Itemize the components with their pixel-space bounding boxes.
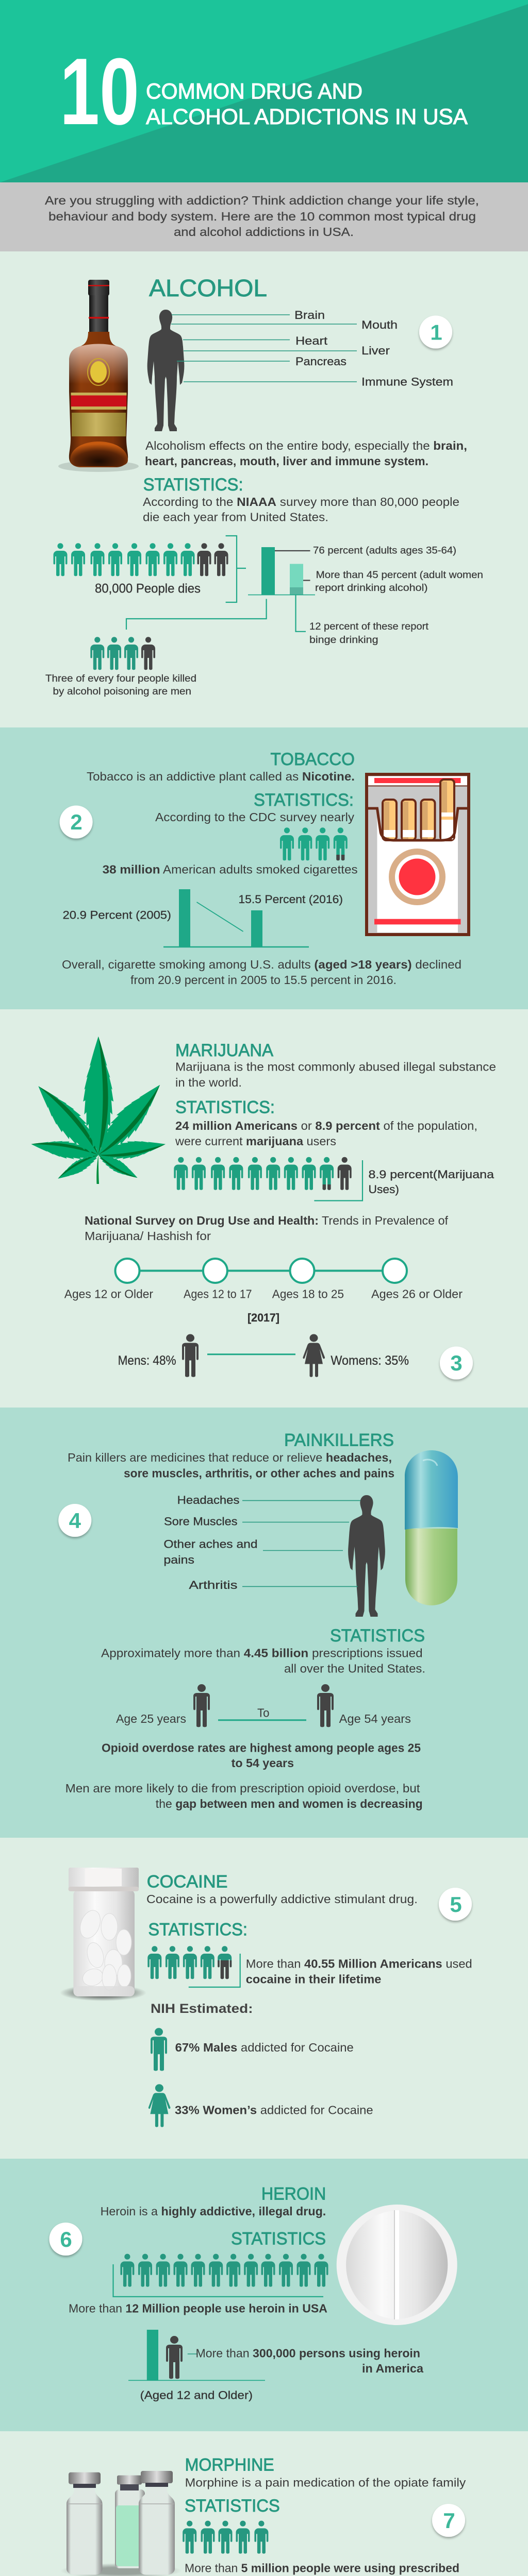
- men vs women: Mens: 48%: [118, 1353, 176, 1368]
- badge: number 6: 6: [60, 2227, 72, 2251]
- bracket: [226, 536, 246, 602]
- organ labels: [171, 309, 453, 388]
- overall text: from 20.9 percent in 2005 to 15.5 percent in 2016.: [130, 973, 397, 987]
- marijuana description: Marijuana is the most commonly abused illegal substance: [175, 1060, 496, 1074]
- statistics text: were current marijuana users: [175, 1134, 336, 1148]
- heading: tobacco: TOBACCO: [270, 750, 355, 769]
- icon: human body: [348, 1495, 385, 1617]
- panel: introduction: [0, 182, 528, 251]
- alcohol description: [145, 439, 467, 468]
- organ labels: Pancreas: [295, 355, 346, 368]
- caption: 40.55 million: cocaine in their lifetime: [246, 1973, 381, 1986]
- bar chart: percentages: binge drinking: [309, 635, 378, 646]
- statistics text: 24 million Americans or 8.9 percent of the population,: [175, 1119, 477, 1132]
- pictogram: 5 people: [183, 2521, 268, 2554]
- painkillers description: sore muscles, arthritis, or other aches and pains: [124, 1466, 394, 1480]
- title: COMMON DRUG AND: [146, 79, 362, 104]
- bar chart: 300,000 persons: More than 300,000 persons using heroin: [196, 2346, 420, 2360]
- icon: cannabis leaf: [29, 1037, 170, 1184]
- male stat: [151, 2028, 354, 2071]
- panel: morphine: [0, 2431, 528, 2576]
- age range graphic: Age 25 years: [116, 1712, 186, 1725]
- heading: heroin: HEROIN: [261, 2184, 326, 2204]
- badge: number 5: 5: [450, 1892, 462, 1917]
- badge: number 7: [432, 2504, 465, 2537]
- heading: statistics: STATISTICS:: [143, 475, 243, 495]
- caption: 40.55 million: [246, 1957, 472, 1986]
- pictogram: 12 people: [120, 2254, 328, 2287]
- timeline: age groups: Ages 26 or Older: [371, 1287, 463, 1300]
- opioid overdose text: to 54 years: [232, 1756, 294, 1770]
- NIH estimated heading: NIH Estimated:: [151, 2002, 253, 2016]
- men vs women: [118, 1334, 409, 1377]
- symptom labels: Other aches and: [163, 1538, 258, 1551]
- icon: white tablet: [337, 2205, 457, 2325]
- badge: number 6: [50, 2223, 82, 2256]
- bar chart: percentages: More than 45 percent (adult women: [316, 570, 483, 581]
- caption: 12 million: More than 12 Million people use heroin in USA: [69, 2302, 327, 2315]
- bar chart: smoking decline: [63, 889, 343, 947]
- male stat: 67% Males addicted for Cocaine: [175, 2041, 354, 2054]
- overall text: Overall, cigarette smoking among U.S. adults (aged >18 years) declined: [62, 958, 461, 971]
- heading: painkillers: PAINKILLERS: [284, 1431, 394, 1450]
- intro text: [45, 194, 479, 239]
- overall text: [62, 958, 461, 987]
- heading: morphine: MORPHINE: [185, 2455, 274, 2475]
- age range graphic: Age 54 years: [339, 1712, 411, 1725]
- caption: alcohol poisoning: [45, 673, 196, 697]
- heading: statistics: STATISTICS: [185, 2496, 280, 2516]
- heading: statistics: STATISTICS: [330, 1626, 425, 1646]
- alcohol description: heart, pancreas, mouth, liver and immune system.: [145, 454, 428, 468]
- organ labels: Mouth: [361, 318, 398, 331]
- gender gap text: Men are more likely to die from prescription opioid overdose, but: [65, 1782, 420, 1795]
- badge: number 1: [419, 315, 452, 348]
- pictogram: 10 people: [54, 543, 228, 576]
- men vs women: Womens: 35%: [331, 1353, 409, 1368]
- intro text: behaviour and body system. Here are the 10 common most typical drug: [48, 210, 476, 223]
- timeline: age groups: [64, 1259, 463, 1300]
- painkillers description: [68, 1451, 394, 1480]
- statistics text: According to the NIAAA survey more than 80,000 people: [143, 495, 459, 509]
- caption: 8.9 percent: Uses): [368, 1183, 399, 1196]
- heroin description: Heroin is a highly addictive, illegal drug.: [101, 2205, 326, 2218]
- panel: heroin: [0, 2159, 528, 2431]
- heading: statistics: STATISTICS: [231, 2229, 326, 2249]
- icon: liquor bottle: [58, 280, 139, 472]
- intro text: Are you struggling with addiction? Think addiction change your life style,: [45, 194, 479, 207]
- bar chart: smoking decline: 20.9 Percent (2005): [63, 909, 171, 922]
- statistics text: Approximately more than 4.45 billion prescriptions issued: [101, 1647, 423, 1660]
- badge: number 4: 4: [69, 1509, 81, 1533]
- statistics text: [143, 495, 459, 523]
- age range graphic: To: [257, 1706, 269, 1720]
- statistics text: According to the CDC survey nearly: [155, 810, 355, 824]
- heading: marijuana: MARIJUANA: [175, 1041, 273, 1060]
- heading: statistics: STATISTICS:: [175, 1097, 275, 1117]
- badge: number 3: 3: [450, 1351, 463, 1375]
- badge: number 7: 7: [443, 2509, 455, 2533]
- statistics text: die each year from United States.: [143, 510, 328, 523]
- panel: alcohol: [0, 251, 528, 727]
- tobacco description: Tobacco is an addictive plant called as Nicotine.: [87, 770, 355, 783]
- caption: 8.9 percent: 8.9 percent(Marijuana: [368, 1168, 494, 1181]
- panel: marijuana: [31, 1037, 496, 1382]
- caption: alcohol poisoning: by alcohol poisoning are men: [53, 686, 191, 697]
- marijuana description: in the world.: [175, 1076, 242, 1089]
- statistics text: all over the United States.: [284, 1662, 425, 1675]
- connector arrow: [126, 599, 267, 630]
- symptom labels: Headaches: [177, 1494, 239, 1506]
- survey text: National Survey on Drug Use and Health: Trends in Prevalence of: [85, 1214, 449, 1227]
- badge: number 1: 1: [430, 320, 442, 344]
- badge: number 4: [58, 1504, 91, 1537]
- title number 10: 10: [60, 38, 139, 144]
- badge: number 2: 2: [70, 810, 82, 834]
- bar chart: 300,000 persons: in America: [362, 2362, 423, 2375]
- title: [146, 79, 468, 129]
- organ labels: Heart: [295, 334, 327, 347]
- survey text: Marijuana/ Hashish for: [85, 1229, 211, 1243]
- panel: painkillers: [0, 1408, 528, 1838]
- title: ALCOHOL ADDICTIONS IN USA: [146, 105, 468, 129]
- alcohol description: Alcoholism effects on the entire body, especially the brain,: [145, 439, 467, 452]
- statistics text: [175, 1119, 477, 1148]
- icon: pill bottle: [60, 1868, 146, 2001]
- timeline: age groups: Ages 18 to 25: [272, 1287, 344, 1300]
- survey text: [85, 1214, 449, 1243]
- caption: 38 million: 38 million American adults smoked cigarettes: [103, 862, 358, 876]
- bracket: [113, 2264, 323, 2297]
- bar chart: percentages: [248, 546, 483, 646]
- panel: cocaine: [61, 1868, 473, 2127]
- bracket: [189, 1954, 240, 1987]
- timeline: age groups: Ages 12 or Older: [64, 1287, 153, 1300]
- pictogram: 4 people: [280, 827, 348, 860]
- cocaine description: Cocaine is a powerfully addictive stimulant drug.: [146, 1892, 418, 1906]
- heading: statistics: STATISTICS:: [254, 790, 354, 810]
- intro text: and alcohol addictions in USA.: [174, 225, 354, 239]
- symptom labels: Sore Muscles: [164, 1515, 237, 1528]
- marijuana description: [175, 1060, 496, 1089]
- female stat: 33% Women’s addicted for Cocaine: [175, 2104, 373, 2117]
- pictogram: 4 people: [90, 637, 155, 670]
- badge: number 2: [60, 806, 93, 839]
- organ labels: Liver: [361, 344, 390, 357]
- symptom labels: [163, 1494, 360, 1591]
- heading: alcohol: ALCOHOL: [149, 275, 267, 301]
- icon: capsule: [405, 1450, 458, 1605]
- caption: alcohol poisoning: Three of every four people killed: [45, 673, 196, 684]
- bar chart: 300,000 persons: [128, 2330, 423, 2401]
- heading: statistics: STATISTICS:: [148, 1920, 248, 1939]
- icon: cigarette pack: [367, 774, 469, 935]
- bar chart: percentages: 76 percent (adults ages 35-64): [313, 546, 456, 556]
- caption: 80,000 people dies: 80,000 People dies: [95, 582, 201, 596]
- bar chart: 300,000 persons: (Aged 12 and Older): [140, 2388, 253, 2401]
- gender gap text: [65, 1782, 423, 1810]
- statistics text: [101, 1647, 425, 1675]
- bar chart: percentages: report drinking alcohol): [315, 583, 428, 594]
- caption: 5 million: More than 5 million people were using prescribed: [185, 2561, 459, 2574]
- caption: 8.9 percent: [368, 1168, 494, 1196]
- pictogram: 10 people: [174, 1157, 352, 1190]
- pictogram: 5 people: [147, 1946, 232, 1979]
- organ labels: Brain: [294, 309, 325, 321]
- organ labels: Immune System: [361, 375, 453, 388]
- age range graphic: [116, 1684, 411, 1727]
- bar chart: smoking decline: 15.5 Percent (2016): [238, 893, 343, 906]
- opioid overdose text: [102, 1741, 421, 1770]
- year label: [2017]: [248, 1311, 279, 1324]
- panel: header: [0, 0, 528, 182]
- icon: vials: [60, 2471, 182, 2576]
- bar chart: percentages: 12 percent of these report: [309, 621, 429, 632]
- painkillers description: Pain killers are medicines that reduce or relieve headaches,: [68, 1451, 392, 1464]
- icon: human body: [147, 310, 184, 431]
- symptom labels: Arthritis: [189, 1579, 237, 1591]
- caption: 40.55 million: More than 40.55 Million Americans used: [246, 1957, 472, 1971]
- panel: tobacco: [0, 727, 528, 1009]
- morphine description: Morphine is a pain medication of the opiate family: [185, 2476, 466, 2489]
- badge: number 5: [439, 1888, 472, 1921]
- opioid overdose text: Opioid overdose rates are highest among people ages 25: [102, 1741, 421, 1755]
- bracket: [314, 1160, 362, 1200]
- female stat: [148, 2084, 373, 2127]
- heading: cocaine: COCAINE: [147, 1872, 228, 1892]
- symptom labels: pains: [163, 1553, 194, 1566]
- badge: number 3: [440, 1347, 473, 1380]
- timeline: age groups: Ages 12 to 17: [184, 1287, 252, 1300]
- gender gap text: the gap between men and women is decreasing: [156, 1797, 423, 1810]
